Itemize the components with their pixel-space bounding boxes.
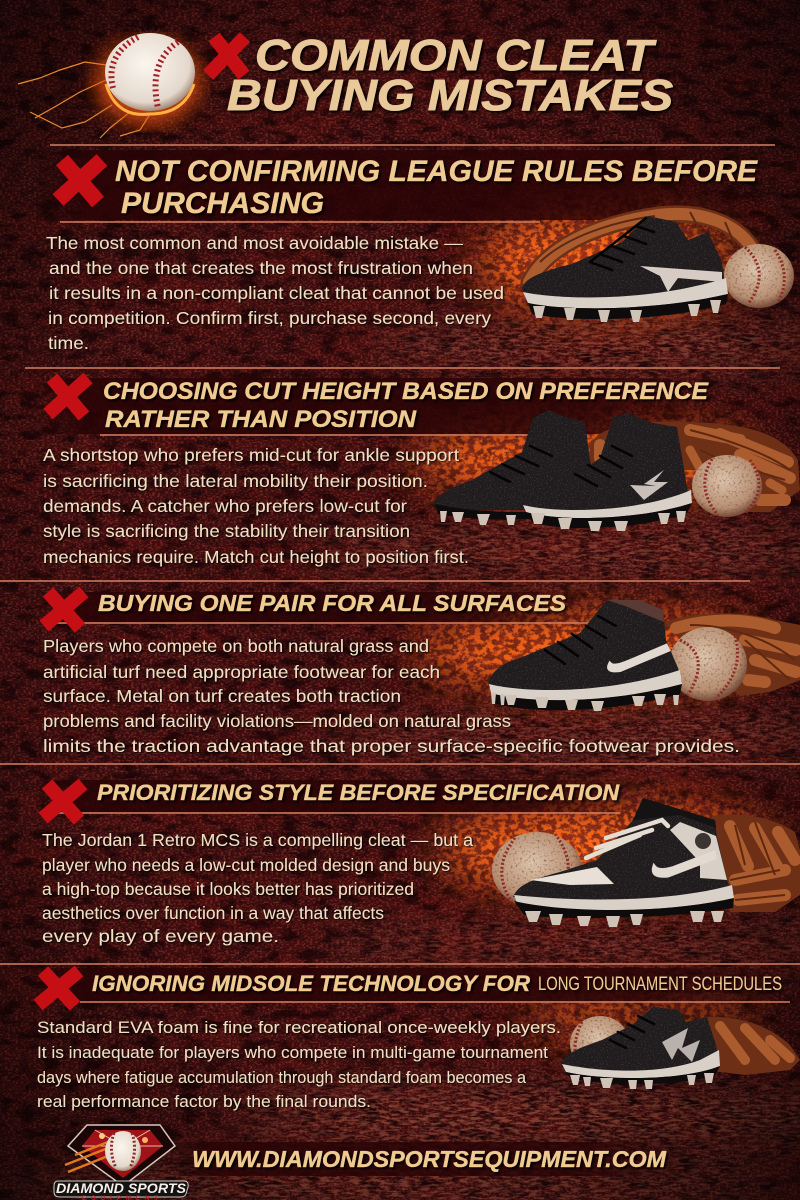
title: BUYING MISTAKES	[227, 71, 673, 120]
body text 1: and the one that creates the most frustration when	[49, 258, 473, 278]
illustration: ball, cleat and glove 4	[492, 798, 800, 927]
footer website URL: WWW.DIAMONDSPORTSEQUIPMENT.COM	[192, 1146, 667, 1172]
body text 4: every play of every game.	[42, 926, 279, 946]
body text 2	[43, 445, 469, 567]
body text 5: real performance factor by the final rounds.	[37, 1092, 371, 1111]
heading 2: CHOOSING CUT HEIGHT BASED ON PREFERENCE	[103, 378, 709, 405]
body text 2: style is sacrificing the stability their transition	[43, 521, 410, 541]
icon: red X 3	[44, 592, 84, 628]
heading 1	[115, 155, 758, 220]
body text 2: is sacrificing the lateral mobility their position.	[43, 471, 428, 491]
body text 3: artificial turf need appropriate footwear for each	[43, 662, 440, 682]
panel: mistake 2	[25, 368, 800, 567]
title	[227, 31, 673, 120]
body text 3: surface. Metal on turf creates both traction	[43, 686, 401, 706]
body text 3	[43, 636, 740, 756]
body text 5: It is inadequate for players who compete in multi-game tournament	[37, 1043, 548, 1062]
body text 2: demands. A catcher who prefers low-cut for	[43, 496, 407, 516]
heading 1: PURCHASING	[121, 187, 324, 220]
body text 3: problems and facility violations—molded on natural grass	[43, 711, 511, 731]
body text 1: time.	[48, 333, 89, 353]
logo: Diamond Sports Equipment: DIAMOND SPORTS	[56, 1180, 187, 1196]
body text 2: A shortstop who prefers mid-cut for ankle support	[43, 445, 459, 465]
body text 2: mechanics require. Match cut height to position first.	[43, 547, 469, 567]
body text 4: a high-top because it looks better has prioritized	[42, 879, 414, 899]
body text 4	[42, 830, 473, 946]
body text 5: Standard EVA foam is fine for recreational once-weekly players.	[37, 1018, 561, 1037]
heading 5: IGNORING MIDSOLE TECHNOLOGY FOR	[92, 971, 530, 996]
panel: mistake 5	[0, 964, 800, 1111]
heading 2: RATHER THAN POSITION	[105, 406, 417, 433]
body text 4: The Jordan 1 Retro MCS is a compelling cleat — but a	[42, 830, 473, 850]
body text 5	[37, 1018, 561, 1111]
heading 3: BUYING ONE PAIR FOR ALL SURFACES	[98, 590, 567, 616]
panel: mistake 3	[0, 581, 800, 756]
illustration: glove, cleat and ball 3	[488, 600, 800, 711]
title: COMMON CLEAT	[255, 31, 656, 80]
heading 2	[103, 378, 709, 433]
body text 1: it results in a non-compliant cleat that cannot be used	[49, 283, 504, 303]
logo: Diamond Sports Equipment	[54, 1125, 188, 1200]
body text 4: player who needs a low-cut molded design and buys	[42, 855, 450, 875]
body text 1	[46, 233, 504, 353]
panel: mistake 4	[0, 764, 800, 946]
illustration: glove, pair of cleats and ball 2	[433, 410, 800, 531]
header baseball with fiery lightning	[18, 33, 200, 138]
icon: red X 5	[38, 971, 79, 1006]
icon: red X 4	[43, 784, 83, 820]
heading 4: PRIORITIZING STYLE BEFORE SPECIFICATION	[97, 780, 620, 805]
illustration: glove, cleat and ball 1	[522, 212, 794, 322]
body text 1: in competition. Confirm first, purchase second, every	[48, 308, 491, 328]
body text 5: days where fatigue accumulation through standard foam becomes a	[37, 1068, 527, 1087]
illustration: ball, cleat and glove 5	[561, 1007, 800, 1089]
body text 1: The most common and most avoidable mistake —	[46, 233, 464, 253]
icon: red X 2	[48, 378, 88, 416]
heading 1: NOT CONFIRMING LEAGUE RULES BEFORE	[115, 155, 758, 188]
body text 3: limits the traction advantage that proper surface-specific footwear provides.	[43, 736, 740, 756]
icon: red X 1	[58, 160, 102, 202]
heading 5	[92, 971, 782, 996]
body text 4: aesthetics over function in a way that affects	[42, 903, 384, 923]
panel: mistake 1	[46, 145, 794, 353]
icon: title red X	[208, 37, 245, 75]
body text 3: Players who compete on both natural grass and	[43, 636, 429, 656]
